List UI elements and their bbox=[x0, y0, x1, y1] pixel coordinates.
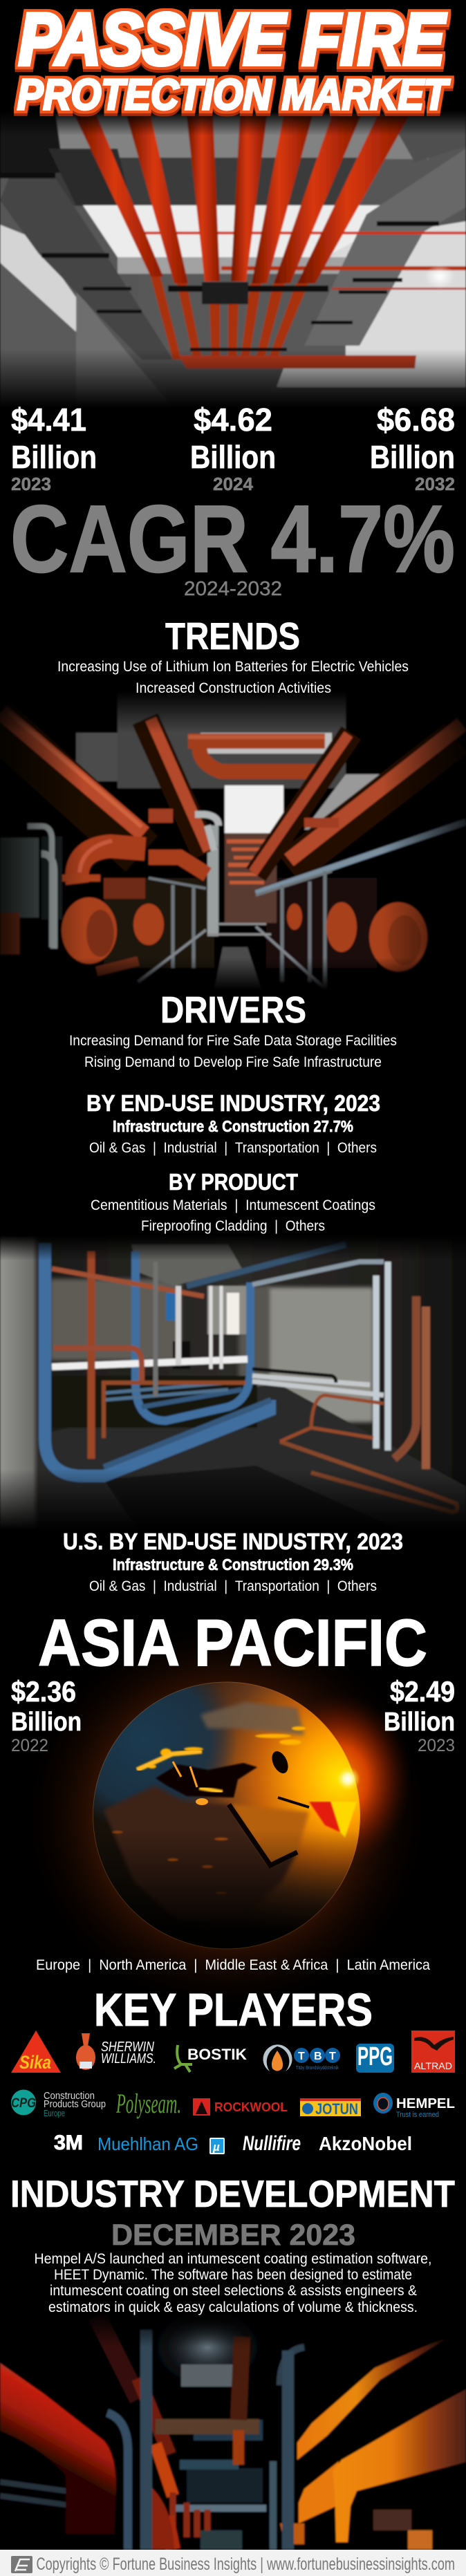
drivers list: Increasing Demand for Fire Safe Data Storage Facilities bbox=[69, 1033, 397, 1049]
logo: PPG: PPG bbox=[357, 2042, 393, 2071]
logo: TBT: B bbox=[314, 2051, 322, 2062]
stat 2023: $4.41 bbox=[11, 402, 86, 438]
segment: by product: BY PRODUCT bbox=[169, 1169, 298, 1195]
stat 2024: 2024 bbox=[213, 474, 254, 494]
Asia Pacific 2023 stat bbox=[384, 1675, 455, 1755]
segment: U.S. by end-use industry 2023 bbox=[63, 1529, 403, 1594]
logo: Sherwin-Williams: WILLIAMS. bbox=[101, 2051, 156, 2066]
logo: Rockwool: ROCKWOOL bbox=[214, 2100, 288, 2114]
development description: intumescent coating on steel selections & assists engineers & bbox=[50, 2282, 417, 2299]
logo: Altrad: ALTRAD bbox=[414, 2060, 452, 2071]
segment: by product bbox=[91, 1169, 375, 1234]
segment: by end-use industry 2023: Oil & Gas | Industrial | Transportation | Others bbox=[89, 1140, 377, 1156]
Asia Pacific 2022 stat: Billion bbox=[11, 1708, 82, 1737]
development description bbox=[35, 2250, 431, 2315]
logo: Sika: Sika bbox=[19, 2052, 51, 2073]
development description: HEET Dynamic. The software has been designed to estimate bbox=[54, 2266, 412, 2283]
market size stats bbox=[11, 402, 455, 494]
Asia Pacific 2023 stat: Billion bbox=[384, 1708, 455, 1737]
segment: U.S. by end-use industry 2023: Infrastructure & Construction 29.3% bbox=[113, 1556, 353, 1574]
photo: industrial red pipe corridor bbox=[0, 691, 466, 990]
logo: TBT: T bbox=[329, 2051, 336, 2062]
Asia Pacific 2023 stat: $2.49 bbox=[390, 1675, 455, 1708]
logo: Rockwool bbox=[193, 2098, 288, 2116]
drivers list: Rising Demand to Develop Fire Safe Infrastructure bbox=[84, 1054, 382, 1070]
logo: Altrad bbox=[411, 2031, 455, 2073]
stat 2024 bbox=[190, 402, 276, 494]
drivers list bbox=[69, 1033, 397, 1070]
trends list: Increased Construction Activities bbox=[136, 680, 331, 696]
logo: Hempel: Trust is earned bbox=[396, 2111, 439, 2119]
globe illustration bbox=[50, 1645, 409, 1986]
development date: DECEMBER 2023 bbox=[111, 2219, 355, 2252]
logo: Construction Products Group: CPG bbox=[11, 2096, 36, 2111]
Asia Pacific 2022 stat: $2.36 bbox=[11, 1675, 76, 1708]
Asia Pacific 2022 stat bbox=[11, 1675, 82, 1755]
logo: Hempel: HEMPEL bbox=[396, 2096, 455, 2111]
development description: Hempel A/S launched an intumescent coating estimation software, bbox=[35, 2250, 431, 2267]
stat 2032: 2032 bbox=[415, 474, 455, 494]
logo: PPG bbox=[356, 2042, 394, 2073]
other regions: Europe | North America | Middle East & Africa | Latin America bbox=[36, 1957, 430, 1973]
logo: Sherwin-Williams: SHERWIN bbox=[101, 2040, 154, 2055]
stat 2023 bbox=[11, 402, 97, 494]
photo: basement with blue and red pipes bbox=[0, 1235, 466, 1530]
segment: by end-use industry 2023: Infrastructure & Construction 27.7% bbox=[113, 1117, 353, 1135]
logo: Bostik bbox=[174, 2045, 247, 2072]
stat 2024: $4.62 bbox=[194, 402, 272, 438]
icon: Fortune Business Insights mark bbox=[11, 2556, 32, 2573]
logo: Jotun: JOTUN bbox=[315, 2100, 358, 2118]
title bbox=[17, 0, 451, 119]
logo: Construction Products Group bbox=[11, 2089, 106, 2118]
stat 2024: Billion bbox=[190, 439, 276, 475]
stat 2032 bbox=[370, 402, 455, 494]
stat 2023: 2023 bbox=[11, 474, 51, 494]
logo: Bostik: BOSTIK bbox=[187, 2046, 247, 2063]
logo: Sherwin-Williams bbox=[76, 2033, 156, 2070]
logo: Jotun bbox=[300, 2098, 361, 2118]
segment: U.S. by end-use industry 2023: U.S. BY END-USE INDUSTRY, 2023 bbox=[63, 1529, 403, 1554]
segment: by end-use industry 2023: BY END-USE INDUSTRY, 2023 bbox=[86, 1090, 380, 1116]
logo: Construction Products Group: Europe bbox=[44, 2108, 65, 2118]
development description: estimators in quick & easy calculations of volume & thickness. bbox=[48, 2299, 418, 2315]
logo: TBT bbox=[263, 2044, 340, 2071]
stat 2023: Billion bbox=[11, 439, 97, 475]
logo: 3M: 3M bbox=[54, 2131, 83, 2154]
stat 2032: Billion bbox=[370, 439, 455, 475]
logo: Construction Products Group: Construction bbox=[44, 2090, 95, 2102]
segment: by product: Cementitious Materials | Intumescent Coatings bbox=[91, 1197, 375, 1213]
heading: drivers: DRIVERS bbox=[160, 989, 306, 1031]
photo: dark pipe corridor with orange glow bbox=[0, 2309, 466, 2550]
segment: U.S. by end-use industry 2023: Oil & Gas | Industrial | Transportation | Others bbox=[89, 1578, 377, 1594]
logo: Muehlhan AG: Muehlhan AG bbox=[97, 2134, 198, 2154]
segment: by product: Fireproofing Cladding | Others bbox=[141, 1218, 325, 1234]
CAGR period: 2024-2032 bbox=[184, 578, 282, 600]
stat 2032: $6.68 bbox=[377, 402, 455, 438]
logo: TBT: Täby Brandskyddsteknik bbox=[296, 2066, 339, 2071]
logo: Sika bbox=[11, 2031, 61, 2073]
logo: Polyseam: Polyseam. bbox=[115, 2088, 181, 2119]
segment: by end-use industry 2023 bbox=[86, 1090, 380, 1156]
heading: Asia Pacific: ASIA PACIFIC bbox=[38, 1606, 427, 1680]
Asia Pacific 2023 stat: 2023 bbox=[418, 1736, 455, 1755]
logo: TBT: T bbox=[298, 2051, 305, 2062]
footer bar bbox=[0, 2550, 466, 2576]
trends list bbox=[57, 659, 409, 696]
logo: Nullifire: Nullifire bbox=[243, 2132, 301, 2155]
heading: key players: KEY PLAYERS bbox=[94, 1984, 373, 2036]
logo: AkzoNobel: AkzoNobel bbox=[319, 2133, 412, 2154]
trends list: Increasing Use of Lithium Ion Batteries for Electric Vehicles bbox=[57, 659, 409, 675]
logo: Construction Products Group: Products Group bbox=[44, 2098, 106, 2110]
heading: trends: TRENDS bbox=[165, 615, 300, 657]
Asia Pacific 2022 stat: 2022 bbox=[11, 1736, 48, 1755]
logo: Muehlhan AG: µ bbox=[212, 2140, 220, 2154]
logo: Hempel bbox=[373, 2093, 455, 2119]
photo: red sprinkler pipes on ceiling bbox=[0, 111, 466, 416]
